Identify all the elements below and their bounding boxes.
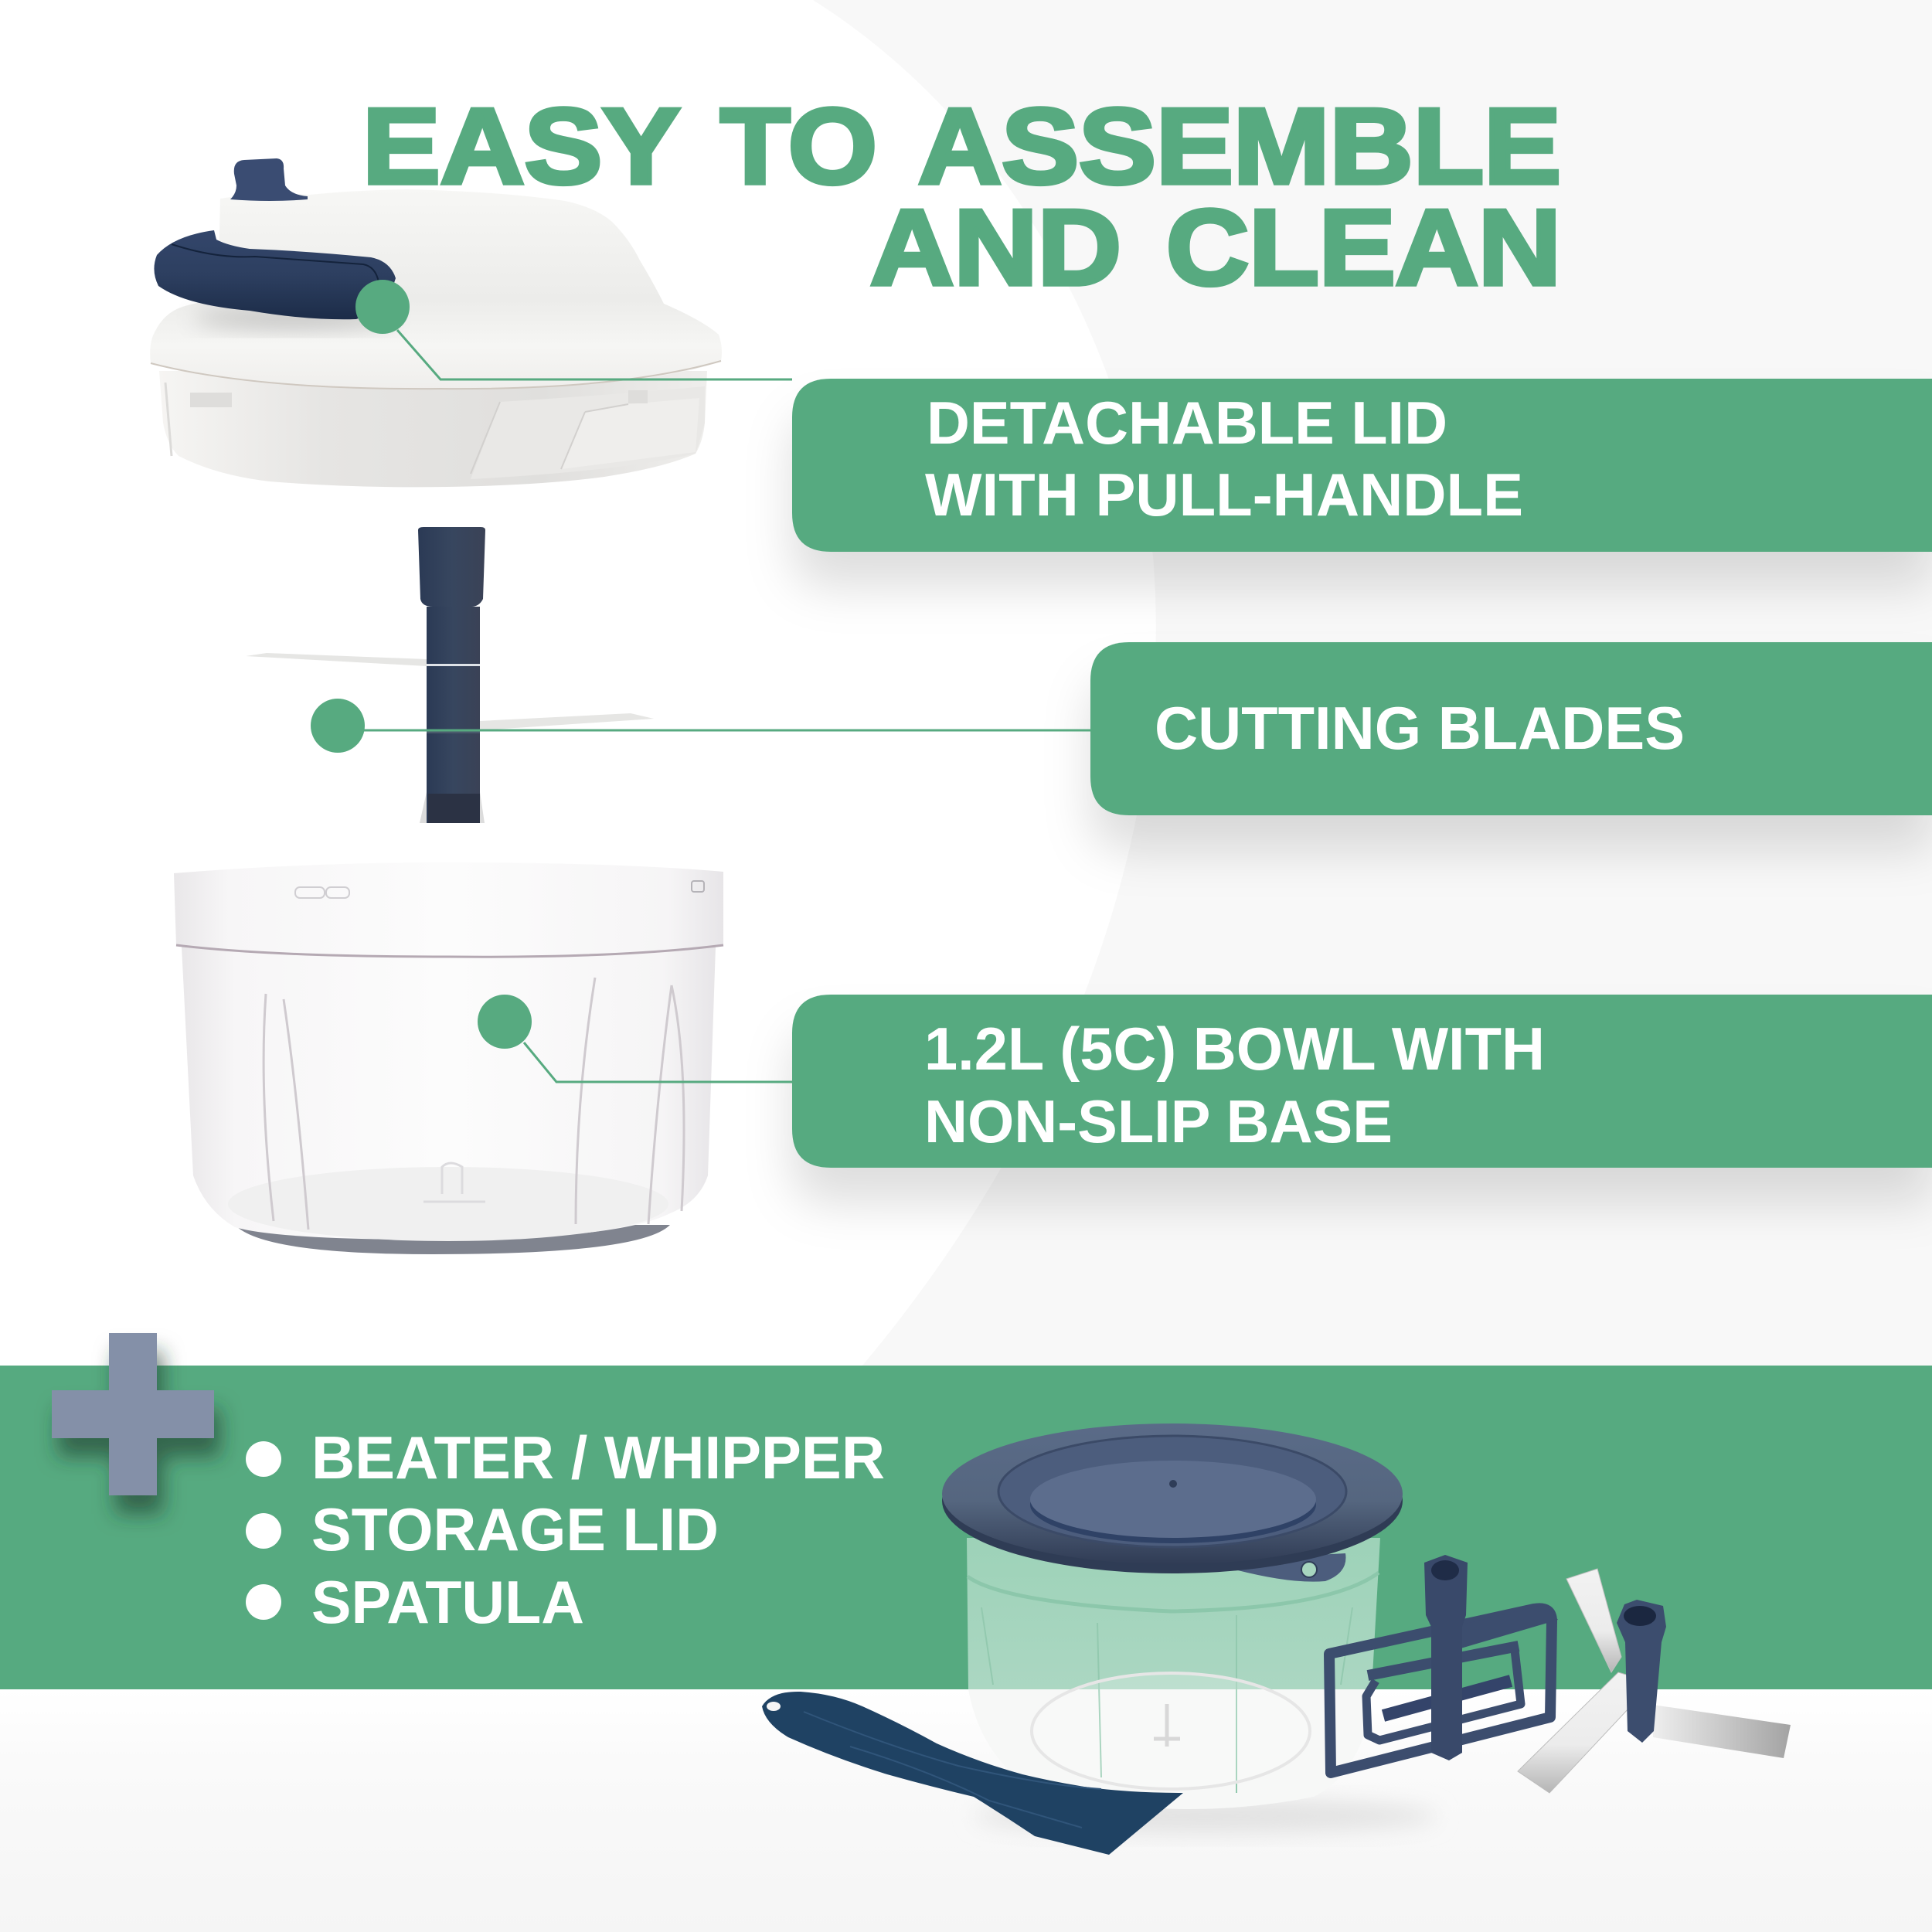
panel: cutting blades label bar: CUTTING BLADES <box>1155 694 1685 762</box>
panel: included accessories band <box>0 1366 1932 1689</box>
illustration: bowl with storage lid <box>942 1423 1437 1833</box>
illustration: chopper lid with pull handle <box>150 158 722 487</box>
title: ASSEMBLE <box>918 87 1561 206</box>
panel: detachable lid label bar <box>792 379 1932 552</box>
illustration: clear 1.2L bowl <box>174 862 723 1254</box>
title: AND <box>870 188 1121 308</box>
icon: plus sign <box>52 1333 214 1495</box>
callout: lid marker and leader <box>355 280 792 379</box>
illustration: small blade assembly <box>1518 1569 1791 1793</box>
panel: detachable lid label bar: WITH PULL-HANDLE <box>925 461 1523 529</box>
list: accessories: SPATULA <box>311 1568 584 1636</box>
panel: detachable lid label bar: DETACHABLE LID <box>927 389 1447 457</box>
title: CLEAN <box>1166 188 1561 308</box>
callout: bowl marker and leader <box>478 995 792 1082</box>
title <box>362 87 1561 308</box>
panel: bowl label bar: NON-SLIP BASE <box>924 1087 1393 1155</box>
illustration: beater whipper <box>1329 1555 1558 1773</box>
panel: bowl label bar <box>792 995 1932 1168</box>
list: accessories <box>246 1423 885 1636</box>
list: accessories: BEATER / WHIPPER <box>311 1423 885 1492</box>
panel: bowl label bar: 1.2L (5C) BOWL WITH <box>924 1015 1545 1083</box>
illustration: spatula <box>762 1692 1183 1855</box>
callout: blades marker and leader <box>311 699 1090 753</box>
title: EASY <box>362 87 680 206</box>
list: accessories: STORAGE LID <box>311 1495 719 1563</box>
title: TO <box>720 87 877 206</box>
illustration: cutting blades on shaft <box>246 527 654 823</box>
panel: cutting blades label bar <box>1090 642 1932 815</box>
